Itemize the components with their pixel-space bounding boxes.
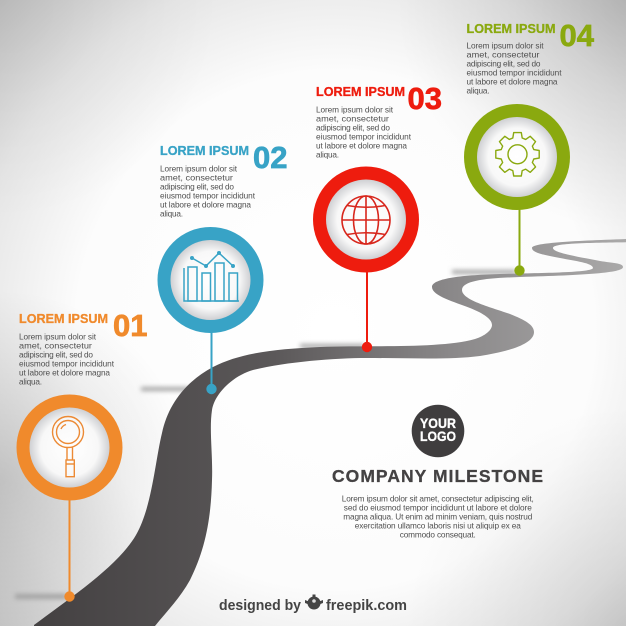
text block 02: Lorem ipsum dolor sit bbox=[160, 164, 238, 174]
text block 03: Lorem ipsum dolor sit bbox=[316, 106, 394, 114]
icon: globe bbox=[342, 196, 390, 244]
number 03: 03 bbox=[408, 81, 442, 116]
text block 02: adipiscing elit, sed do bbox=[160, 182, 234, 192]
icon: magnifier bbox=[52, 416, 84, 477]
text block 01: adipiscing elit, sed do bbox=[19, 350, 93, 360]
pin circle 04 bbox=[464, 104, 570, 210]
number 01: 01 bbox=[113, 308, 147, 343]
text block 04: ut labore et dolore magna bbox=[466, 78, 558, 86]
heading 01: LOREM IPSUM bbox=[19, 311, 108, 326]
text block 04: Lorem ipsum dolor sit bbox=[466, 42, 544, 50]
text block 01: eiusmod tempor incididunt bbox=[19, 360, 115, 368]
text block 04: aliqua. bbox=[466, 86, 490, 96]
heading 04: LOREM IPSUM bbox=[466, 21, 556, 36]
description bbox=[342, 495, 534, 540]
text block 02: eiusmod tempor incididunt bbox=[160, 192, 256, 200]
text block 03: amet, consectetur bbox=[316, 114, 389, 124]
icon: gear bbox=[496, 133, 539, 176]
milestone 03 bbox=[313, 81, 442, 352]
title: COMPANY MILESTONE bbox=[332, 466, 543, 486]
text block 04: eiusmod tempor incididunt bbox=[466, 68, 562, 78]
text block 04: adipiscing elit, sed do bbox=[466, 60, 541, 68]
description: sed do eiusmod tempor incididunt ut labore et dolore bbox=[344, 504, 532, 513]
text block 03: eiusmod tempor incididunt bbox=[316, 132, 412, 142]
road shadows bbox=[15, 270, 516, 599]
description: exercitation ullamco laboris nisi ut aliquip ex ea bbox=[355, 522, 521, 531]
text block 03: adipiscing elit, sed do bbox=[316, 124, 390, 132]
winding road bbox=[34, 239, 626, 626]
text block 04 bbox=[466, 42, 562, 96]
footer credit: freepik.com bbox=[326, 597, 407, 614]
text block 01 bbox=[19, 332, 115, 386]
stem 02 bbox=[206, 328, 217, 394]
footer credit bbox=[219, 594, 407, 614]
logo badge bbox=[412, 405, 464, 457]
milestone 04 bbox=[464, 18, 595, 276]
description: commodo consequat. bbox=[400, 531, 476, 540]
milestone 01 bbox=[16, 308, 147, 602]
text block 02: ut labore et dolore magna bbox=[160, 200, 251, 210]
stem 04 bbox=[514, 205, 525, 276]
text block 03 bbox=[316, 106, 412, 160]
description: magna aliqua. Ut enim ad minim veniam, quis nostrud bbox=[343, 513, 533, 522]
text block 02: aliqua. bbox=[160, 210, 183, 218]
number 02: 02 bbox=[253, 140, 287, 175]
text block 01: amet, consectetur bbox=[19, 342, 92, 350]
icon: freepik mark bbox=[305, 594, 323, 610]
stem 03 bbox=[362, 268, 372, 352]
pin circle 03 bbox=[313, 166, 419, 272]
text block 03: ut labore et dolore magna bbox=[316, 142, 407, 150]
pin circle 02 bbox=[158, 227, 264, 333]
milestone 02 bbox=[158, 140, 287, 394]
icon: bar chart bbox=[184, 251, 239, 301]
text block 01: ut labore et dolore magna bbox=[19, 368, 110, 378]
logo badge: LOGO bbox=[420, 429, 456, 444]
number 04: 04 bbox=[560, 18, 595, 53]
stem 01 bbox=[64, 495, 75, 602]
pin circle 01 bbox=[16, 394, 122, 500]
heading 02: LOREM IPSUM bbox=[160, 143, 249, 158]
logo badge: YOUR bbox=[420, 416, 456, 431]
text block 04: amet, consectetur bbox=[466, 50, 540, 60]
heading 03: LOREM IPSUM bbox=[316, 84, 405, 99]
text block 02 bbox=[160, 164, 256, 218]
footer credit: designed by bbox=[219, 598, 301, 614]
text block 02: amet, consectetur bbox=[160, 174, 233, 182]
text block 01: Lorem ipsum dolor sit bbox=[19, 332, 97, 342]
text block 01: aliqua. bbox=[19, 378, 42, 386]
text block 03: aliqua. bbox=[316, 150, 339, 160]
description: Lorem ipsum dolor sit amet, consectetur adipiscing elit, bbox=[342, 495, 534, 504]
